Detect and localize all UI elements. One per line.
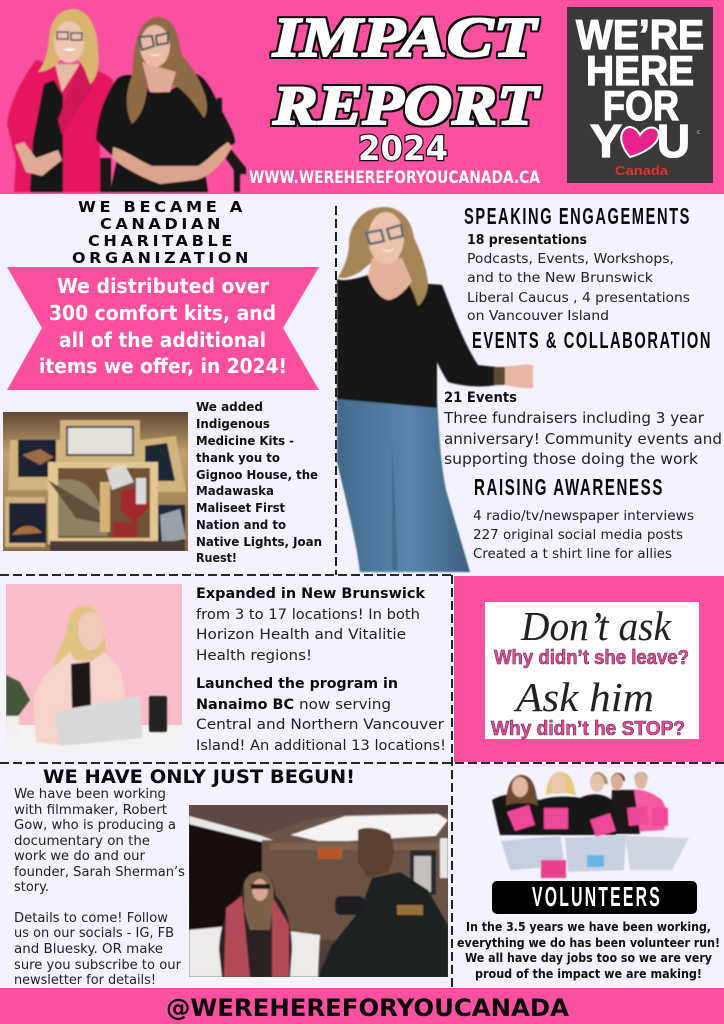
heading: only just begun: WE HAVE ONLY JUST BEGUN! — [43, 766, 355, 788]
text: expansion: Nanaimo BC — [196, 697, 294, 713]
title — [272, 7, 541, 137]
text: indigenous medicine kits: Indigenous — [196, 417, 270, 431]
left woman top — [30, 80, 63, 192]
woman in plaid — [219, 872, 292, 977]
text: documentary: We have been working — [14, 787, 166, 802]
text: documentary: documentary on the — [14, 834, 150, 849]
text: volunteer run: proud of the impact we are making! — [475, 967, 702, 981]
text: indigenous medicine kits: Medicine Kits - — [196, 434, 294, 448]
left woman lapel — [58, 62, 92, 135]
text: expansion: Horizon Health and Vitalitie — [196, 627, 406, 643]
raising awareness: 227 original social media posts — [473, 528, 683, 543]
ribbon callout: We distributed over — [57, 274, 270, 298]
text: expansion: Health regions! — [196, 648, 312, 664]
text: indigenous medicine kits: thank you to — [196, 451, 280, 465]
text: documentary: Gow, who is producing a — [14, 818, 176, 833]
cameraman — [358, 828, 394, 878]
speaking engagements: Podcasts, Events, Workshops, — [467, 252, 674, 267]
speaking engagements: 18 presentations — [467, 232, 587, 248]
text: expansion: now serving — [299, 697, 391, 713]
right woman arms — [112, 142, 232, 184]
text: documentary: and Bluesky. OR make — [14, 942, 163, 957]
text: documentary: sure you subscribe to our — [14, 958, 182, 973]
raising awareness: 4 radio/tv/newspaper interviews — [473, 509, 694, 524]
raising awareness: Created a t shirt line for allies — [473, 547, 672, 562]
photo: volunteers with kits — [492, 772, 689, 878]
text: indigenous medicine kits: We added — [196, 400, 263, 414]
icon: heart — [621, 127, 659, 157]
heading: charitable organization: CANADIAN — [100, 215, 224, 233]
events and collaboration: supporting those doing the work — [444, 450, 698, 468]
panel: don't ask: Don’t ask — [520, 603, 672, 649]
text: indigenous medicine kits: Native Lights, Joan — [196, 535, 322, 549]
events and collaboration: 21 Events — [444, 390, 517, 406]
text: documentary: Details to come! Follow — [14, 911, 168, 926]
top — [337, 275, 496, 408]
face — [368, 212, 404, 264]
text: expansion: Island! An additional 13 locations! — [196, 738, 446, 754]
text: documentary: work we do and our — [14, 849, 146, 864]
logo: WE’RE — [576, 11, 704, 58]
photo: medicine kit — [3, 412, 188, 551]
left woman hands — [15, 142, 62, 176]
left woman chest — [55, 64, 80, 92]
logo: c — [697, 129, 700, 136]
panel: documentary — [14, 766, 448, 988]
speaking engagements: Liberal Caucus , 4 presentations — [467, 291, 690, 306]
events and collaboration: anniversary! Community events and — [444, 430, 722, 448]
text: expansion: from 3 to 17 locations! In both — [196, 607, 420, 623]
logo: Canada — [615, 163, 669, 178]
volunteers label — [492, 881, 697, 914]
panel: don't ask: Ask him — [513, 674, 654, 720]
right woman dress — [96, 74, 235, 192]
heading: charitable organization — [72, 198, 252, 267]
panel: charity — [3, 198, 322, 565]
photo: filming in the snow — [189, 805, 448, 977]
text: indigenous medicine kits: Maliseet First — [196, 501, 285, 515]
raising awareness — [473, 474, 694, 562]
photo: two founders — [7, 9, 246, 192]
speaking engagements: and to the New Brunswick — [467, 271, 654, 286]
social handle: @WEREHEREFORYOUCANADA — [166, 994, 569, 1022]
speaking engagements — [464, 203, 691, 324]
left woman blazer — [7, 60, 113, 192]
heading: charitable organization: WE BECAME A — [78, 198, 246, 216]
ribbon callout: all of the additional — [59, 328, 266, 352]
text: indigenous medicine kits: Ruest! — [196, 551, 237, 565]
events and collaboration: Three fundraisers including 3 year — [443, 409, 705, 427]
photo: founder standing — [337, 207, 533, 572]
text: indigenous medicine kits — [196, 400, 322, 565]
text: indigenous medicine kits: Madawaska — [196, 484, 274, 498]
text: documentary: newsletter for details! — [14, 973, 156, 988]
panel: don't ask — [454, 576, 724, 762]
text: expansion: Expanded in New Brunswick — [196, 586, 426, 602]
right woman hair and face — [127, 17, 207, 124]
ribbon callout: items we offer, in 2024! — [39, 354, 287, 378]
logo: U — [657, 115, 690, 167]
chair — [97, 98, 246, 192]
text: documentary — [14, 787, 185, 988]
left woman hair and face — [38, 9, 99, 84]
website url: WWW.WEREHEREFORYOUCANADA.CA — [249, 168, 540, 187]
logo: HERE — [586, 47, 694, 94]
text: documentary: with filmmaker, Robert — [14, 803, 167, 818]
footer band — [0, 988, 724, 1024]
section dividers — [0, 206, 724, 988]
panel: don't ask: Why didn’t she leave? — [494, 647, 689, 669]
text: documentary: founder, Sarah Sherman’s — [14, 865, 185, 880]
hair — [338, 207, 428, 306]
logo: FOR — [603, 82, 679, 129]
text: documentary: us on our socials - IG, FB — [14, 926, 174, 941]
text: indigenous medicine kits: Nation and to — [196, 518, 286, 532]
text: expansion: Central and Northern Vancouver — [196, 717, 444, 733]
title: IMPACT — [272, 7, 539, 69]
neck and chest — [368, 258, 412, 300]
ribbon callout — [7, 267, 319, 390]
heading: charitable organization: ORGANIZATION — [72, 249, 252, 267]
text: expansion: Launched the program in — [196, 676, 398, 692]
text: volunteer run — [457, 920, 720, 981]
logo — [567, 7, 713, 183]
panel: achievements — [443, 203, 722, 562]
ribbon callout: 300 comfort kits, and — [49, 301, 276, 325]
panel: volunteers — [457, 772, 720, 981]
header band — [0, 0, 724, 194]
heading: charitable organization: CHARITABLE — [88, 232, 236, 250]
title: REPORT — [272, 75, 541, 137]
text: indigenous medicine kits: Gignoo House, the — [196, 468, 318, 482]
text: expansion — [196, 586, 446, 754]
speaking engagements: on Vancouver Island — [467, 309, 609, 324]
text: documentary: story. — [14, 880, 49, 895]
photo: woman with laptop — [6, 584, 182, 753]
logo: Y — [590, 115, 622, 167]
panel: don't ask: Why didn’t he STOP? — [491, 718, 685, 740]
hand — [496, 365, 533, 388]
jeans — [337, 398, 470, 572]
events and collaboration — [443, 327, 722, 468]
year: 2024 — [358, 129, 448, 169]
